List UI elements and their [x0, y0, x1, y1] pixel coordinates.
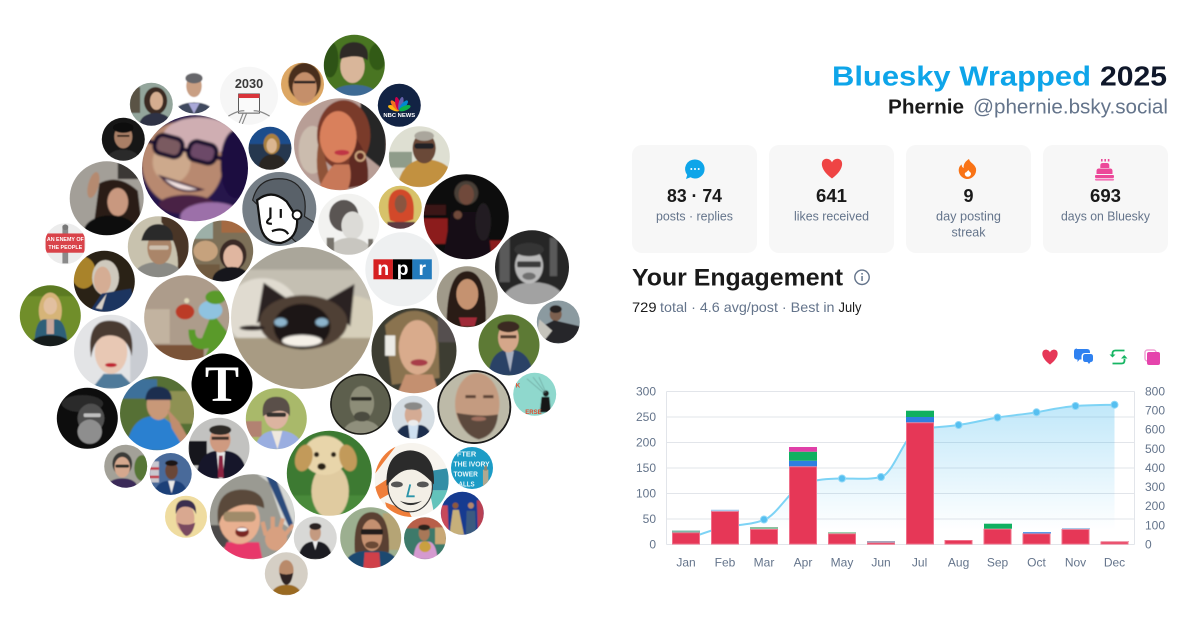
icon: likes heart	[1042, 350, 1058, 365]
avatar: New York Times logo: T	[205, 356, 239, 413]
user name and handle: @phernie.bsky.social	[973, 96, 1168, 118]
right axis labels: 500	[1145, 442, 1165, 456]
avatar: man in tuxedo	[294, 516, 337, 560]
avatar: after the ivory tower falls book: ALLS	[459, 480, 475, 488]
icon: quotes copy squares	[1145, 350, 1160, 365]
avatar: man under a blanket	[536, 300, 580, 344]
engagement summary: July	[838, 299, 862, 315]
month labels: Jul	[912, 556, 927, 570]
avatar: joyful woman waving in car	[193, 457, 312, 576]
right axis labels: 200	[1145, 499, 1165, 513]
title: 2025	[1100, 60, 1167, 92]
avatar: man in sunglasses and yellow shirt	[388, 126, 450, 188]
avatar: NPR logo: n	[377, 259, 389, 280]
avatar: 2030 illustration: 2030	[235, 76, 263, 91]
right axis labels: 600	[1145, 423, 1165, 437]
right axis labels: 300	[1145, 480, 1165, 494]
cumulative line	[686, 405, 1114, 540]
engagement summary: 729	[632, 299, 657, 315]
avatar: woman with dark bob	[130, 82, 173, 126]
panel: day posting streak: day posting	[936, 210, 1001, 224]
month labels: Sep	[987, 556, 1008, 570]
left axis labels: 50	[643, 512, 656, 526]
avatar: golden retriever puppy	[286, 430, 372, 516]
left axis labels: 300	[636, 384, 656, 398]
avatar: after the ivory tower falls book: TOWER	[454, 470, 478, 478]
avatar: woman with dark straight hair	[436, 266, 498, 328]
avatar: two people shaking hands before flags	[440, 492, 484, 535]
panel: day posting streak: streak	[952, 226, 986, 240]
chart: monthly engagement	[636, 384, 1165, 570]
icon: birthday cake	[1095, 159, 1114, 181]
avatar: NPR logo: p	[397, 259, 409, 280]
avatar: woman with hand on head	[70, 161, 144, 236]
panel: posts and replies: 83 · 74	[667, 186, 722, 206]
avatar: blonde woman selfie	[372, 308, 456, 394]
icon: heart	[822, 159, 842, 179]
icon: info	[855, 270, 869, 284]
right axis labels: 400	[1145, 461, 1165, 475]
month labels: Apr	[794, 556, 812, 570]
panel: likes received	[769, 145, 894, 253]
title	[832, 60, 1167, 92]
avatar: 2030 illustration	[220, 67, 278, 124]
avatar: NBC News logo	[378, 84, 421, 127]
avatar: woman in black dress in theatre	[424, 174, 509, 260]
avatar: teal book cover	[513, 372, 556, 416]
avatar: pencil sketch woman	[318, 194, 379, 255]
month labels: Aug	[948, 556, 969, 570]
engagement summary: total · 4.6 avg/post · Best in	[660, 299, 834, 315]
right axis labels: 100	[1145, 518, 1165, 532]
month labels: Nov	[1065, 556, 1086, 570]
avatar: NBC News logo: NBC NEWS	[383, 113, 416, 119]
avatar: woman with red hair	[378, 186, 422, 229]
avatar: kermit sipping tea	[144, 275, 230, 360]
avatar: bald man with dark beard	[256, 544, 316, 604]
avatar: teal book cover: ERSE	[525, 410, 542, 416]
panel: day posting streak: 9	[963, 186, 974, 206]
avatar: long-haired man in sunglasses	[340, 507, 402, 568]
left axis labels: 200	[636, 436, 656, 450]
heading: Your Engagement: Your Engagement	[632, 264, 843, 292]
avatar: NPR logo: r	[419, 259, 427, 280]
left axis labels: 100	[636, 486, 656, 500]
icon: reposts arrows	[1110, 350, 1128, 364]
month labels: Oct	[1027, 556, 1046, 570]
avatar: older man with white beard	[392, 396, 435, 439]
month labels: Mar	[754, 556, 774, 570]
avatar: older woman with white hair	[74, 250, 135, 312]
panel: days on Bluesky: days on Bluesky	[1061, 210, 1151, 224]
panel: posts and replies: posts · replies	[656, 210, 733, 224]
avatar: sepia portrait man	[330, 374, 392, 435]
avatar: woman with glasses and lavender blazer	[234, 376, 319, 461]
avatar cluster	[8, 23, 588, 604]
right axis labels: 0	[1145, 538, 1152, 552]
month labels: Jun	[871, 556, 891, 570]
avatar: blonde woman on grass	[20, 285, 81, 346]
avatar: woman at waterfront	[248, 126, 292, 170]
upper bar segments	[672, 411, 1129, 543]
right axis labels: 800	[1145, 384, 1165, 398]
avatar: after the ivory tower falls book: FTER	[457, 450, 476, 458]
avatar: cartoon man	[374, 443, 449, 517]
cumulative area	[686, 405, 1114, 544]
avatar: comic self-portrait	[242, 172, 316, 246]
avatar: bald man with beard	[437, 370, 512, 444]
avatar: man in blue shirt and cap	[105, 362, 209, 465]
left axis labels: 150	[636, 461, 656, 475]
avatar: man in blue suit outdoors	[478, 314, 540, 376]
avatar: after the ivory tower falls book: THE IVORY	[454, 460, 490, 468]
right axis labels	[1145, 384, 1165, 552]
avatar: dark portrait of bearded man	[45, 376, 130, 461]
icon: replies speech bubbles	[1074, 348, 1093, 364]
month labels: Jan	[676, 556, 696, 570]
avatar: woman before bookshelf	[192, 220, 254, 282]
avatar: woman with short brown hair	[59, 300, 163, 404]
avatar: man on black background	[102, 118, 145, 161]
month labels	[676, 556, 1125, 570]
user name and handle	[888, 96, 1168, 118]
panel: days on Bluesky: 693	[1090, 186, 1121, 206]
grid lines	[666, 392, 1134, 544]
user name and handle: Phernie	[888, 96, 964, 118]
avatar: an enemy of the people sign: AN ENEMY OF	[47, 237, 84, 243]
panel: days on Bluesky	[1043, 145, 1168, 253]
icon: flame	[959, 159, 976, 179]
chart legend	[1042, 348, 1160, 365]
left axis labels	[636, 384, 656, 552]
month labels: Dec	[1104, 556, 1125, 570]
avatar: NPR logo	[366, 232, 440, 306]
avatar: after the ivory tower falls book	[451, 447, 493, 489]
avatar: older man in suit	[178, 72, 210, 114]
panel: likes received: likes received	[794, 210, 869, 224]
avatar: New York Times logo	[179, 341, 265, 427]
left axis labels: 0	[649, 538, 656, 552]
avatar: woman with long auburn hair	[294, 98, 386, 190]
stacked bars	[672, 423, 1128, 544]
icon: chat bubble	[685, 159, 705, 179]
avatar: man before hedge	[324, 34, 385, 96]
avatar: man holding a burger	[396, 509, 454, 568]
month labels: May	[831, 556, 853, 570]
avatar: black and white man with glasses	[495, 230, 569, 304]
panel: day posting streak	[906, 145, 1031, 253]
cumulative points	[760, 401, 1118, 523]
avatar: person with short hair and glasses	[96, 436, 156, 496]
avatar: bearded man on yellow	[157, 487, 215, 546]
avatar: teal book cover: K	[516, 383, 521, 389]
left axis labels: 250	[636, 410, 656, 424]
avatar: smiling man in purple tones	[142, 115, 248, 222]
panel: likes received: 641	[816, 186, 847, 206]
avatar: woman with glasses	[281, 62, 324, 106]
avatar: an enemy of the people sign	[45, 223, 86, 264]
right axis labels: 700	[1145, 404, 1165, 418]
avatar: man in dark suit and red tie	[176, 406, 262, 491]
avatar: man in suit with American flag	[141, 445, 200, 503]
panel: posts and replies	[632, 145, 757, 253]
month labels: Feb	[715, 556, 736, 570]
avatar: an enemy of the people sign: THE PEOPLE	[48, 245, 83, 251]
avatar: man in cap	[128, 216, 189, 278]
title: Bluesky Wrapped	[832, 60, 1091, 92]
avatar: siamese cat	[231, 247, 373, 389]
